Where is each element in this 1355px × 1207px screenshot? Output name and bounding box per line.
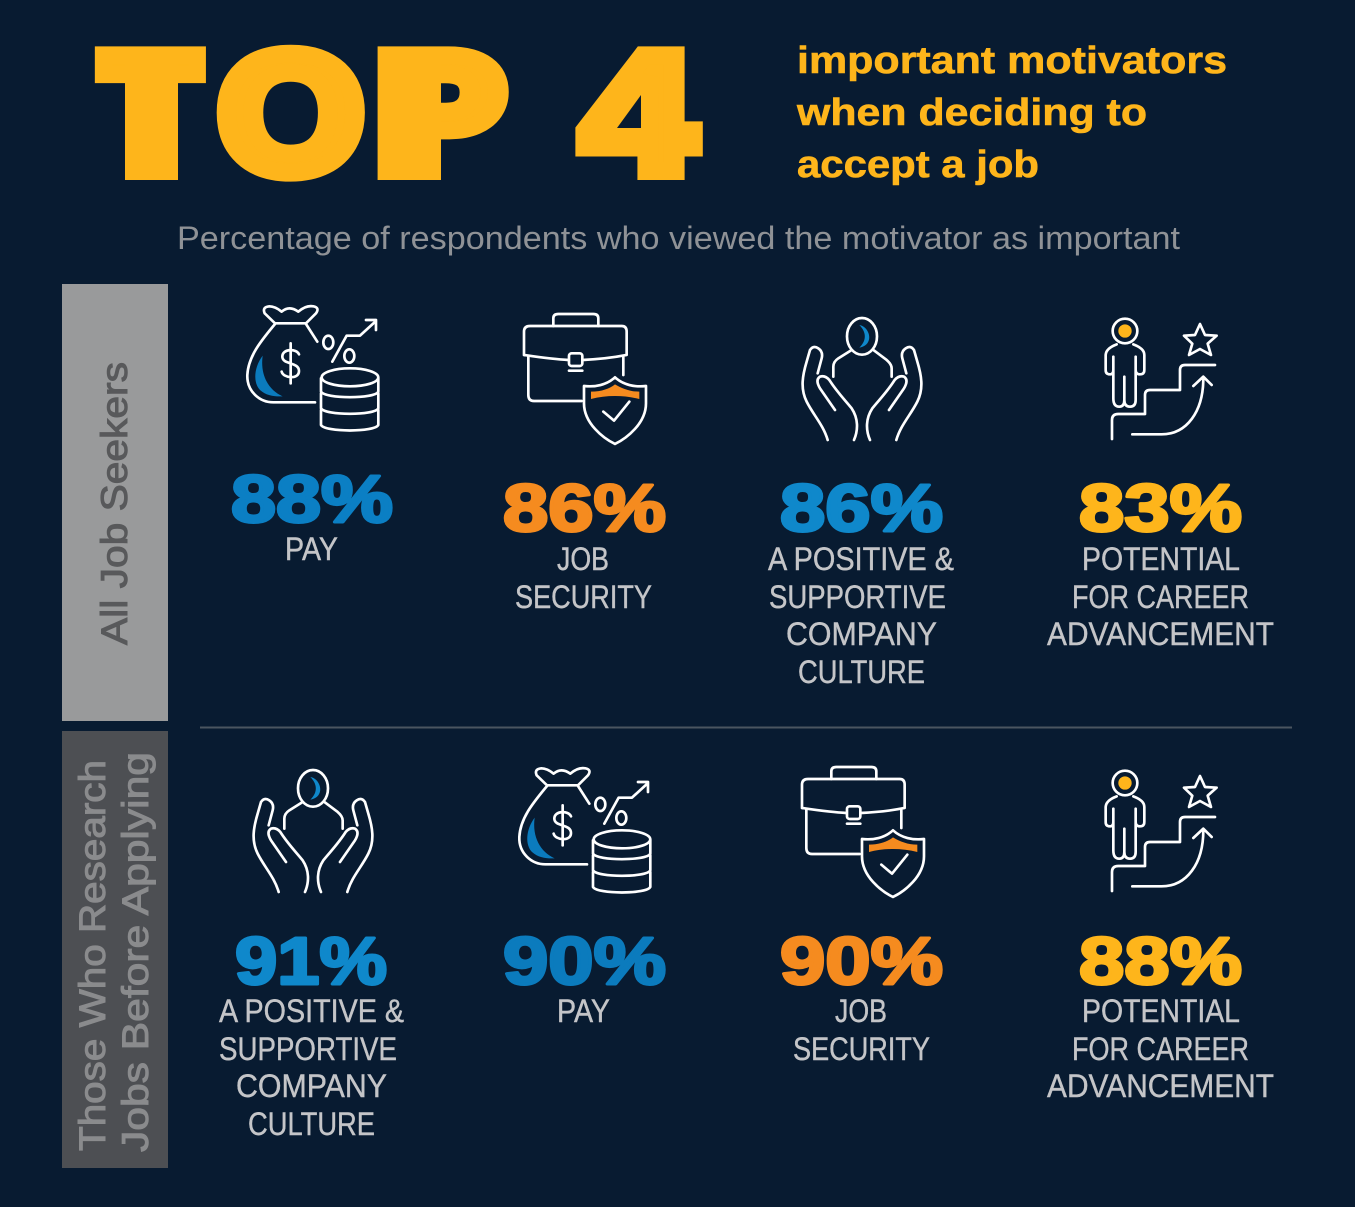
label: career advancement: FOR CAREER	[1072, 579, 1249, 615]
icon: briefcase with shield	[802, 767, 924, 897]
item: job security 90%	[780, 767, 943, 1067]
label: positive culture: SUPPORTIVE	[769, 579, 946, 615]
label: career advancement: ADVANCEMENT	[1047, 1068, 1274, 1104]
label: positive culture: COMPANY	[786, 616, 937, 652]
value 90%: 90%	[780, 924, 943, 999]
label: career advancement: ADVANCEMENT	[1047, 616, 1274, 652]
value 88%: 88%	[231, 462, 393, 537]
panel: all job seekers label: All Job Seekers	[94, 362, 135, 645]
label: job security: SECURITY	[515, 579, 652, 615]
title: TOP 4	[102, 19, 693, 207]
icon: briefcase with shield	[524, 314, 646, 444]
item: pay 90%	[503, 768, 666, 1029]
item: job security 86%	[503, 314, 666, 615]
label: positive culture	[219, 993, 404, 1142]
label: job security: JOB	[835, 993, 887, 1029]
heading: important motivators: important motivators	[797, 40, 1227, 82]
icon: money bag	[519, 768, 650, 892]
label: positive culture	[768, 541, 954, 690]
label: positive culture: COMPANY	[236, 1068, 387, 1104]
icon: money bag	[247, 306, 378, 430]
value 86%: 86%	[503, 471, 666, 546]
icon: supporting hands	[803, 318, 921, 440]
title: TOP 4: P	[375, 19, 505, 207]
label: job security	[515, 541, 652, 615]
title: TOP 4: 4	[583, 19, 693, 207]
label: job security: JOB	[557, 541, 609, 577]
heading: important motivators: accept a job	[797, 144, 1039, 186]
value 86%: 86%	[780, 471, 943, 546]
item: company culture 91%	[219, 770, 404, 1142]
label: positive culture: A POSITIVE &	[219, 993, 404, 1029]
label: pay: PAY	[285, 531, 338, 567]
label: job security	[793, 993, 930, 1067]
label: positive culture: CULTURE	[248, 1106, 375, 1142]
panel: researchers label: Jobs Before Applying	[115, 752, 156, 1152]
icon: supporting hands	[254, 770, 372, 892]
panel: researchers label: Those Who Research	[72, 760, 113, 1151]
item: career advancement 83%	[1047, 319, 1274, 652]
label: career advancement	[1047, 541, 1274, 652]
panel: researchers label	[62, 731, 168, 1168]
icon: person climbing steps	[1106, 319, 1217, 439]
panel: all job seekers label	[62, 284, 168, 721]
value 83%: 83%	[1079, 471, 1242, 546]
label: positive culture: SUPPORTIVE	[219, 1031, 397, 1067]
title: TOP 4: O	[219, 20, 363, 207]
item: company culture 86%	[768, 318, 954, 690]
label: positive culture: CULTURE	[798, 654, 925, 690]
item: career advancement 88%	[1047, 771, 1274, 1104]
heading: important motivators: when deciding to	[796, 92, 1147, 134]
label: pay: PAY	[557, 993, 610, 1029]
value 91%: 91%	[235, 924, 387, 999]
value 88%: 88%	[1079, 924, 1242, 999]
label: career advancement: POTENTIAL	[1082, 541, 1240, 577]
label: job security: SECURITY	[793, 1031, 930, 1067]
value 90%: 90%	[503, 924, 666, 999]
label: career advancement: POTENTIAL	[1082, 993, 1240, 1029]
label: positive culture: A POSITIVE &	[768, 541, 954, 577]
icon: person climbing steps	[1106, 771, 1217, 891]
label: career advancement	[1047, 993, 1274, 1104]
item: pay 88%	[231, 306, 393, 567]
heading: important motivators	[796, 40, 1227, 186]
label: career advancement: FOR CAREER	[1072, 1031, 1249, 1067]
title: TOP 4: T	[102, 19, 199, 207]
subtitle: Percentage of respondents who viewed the motivator as important	[177, 220, 1180, 256]
